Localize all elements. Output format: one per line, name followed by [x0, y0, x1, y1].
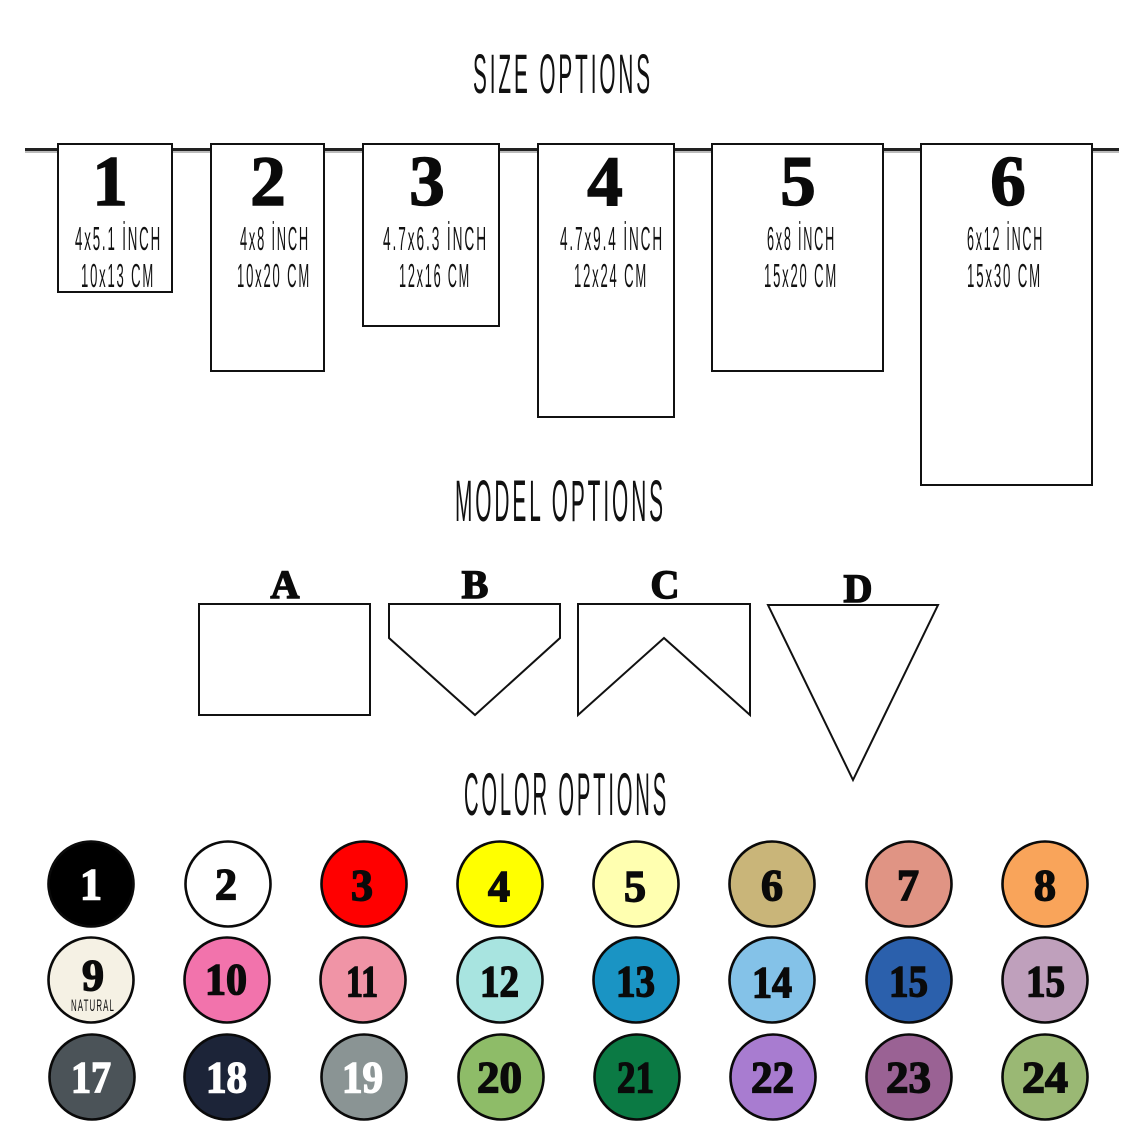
- swatch 21: [594, 1034, 680, 1120]
- model C: swallowtail: C: [651, 562, 679, 607]
- swatch 15 blue: 15: [889, 957, 928, 1006]
- swatch 24: [1002, 1034, 1088, 1120]
- swatch 6: [730, 842, 814, 926]
- panel: size 2: [211, 143, 324, 371]
- text: 4x5.1 İNCH: [75, 220, 162, 257]
- swatch 18: 18: [206, 1053, 247, 1102]
- panel: size 5: 15x20 CM: [764, 257, 838, 294]
- text: MODEL OPTIONS: [455, 469, 666, 534]
- swatch 14: 14: [752, 958, 792, 1007]
- swatch 22: 22: [751, 1053, 794, 1102]
- swatch 11: 11: [346, 957, 378, 1006]
- hanging rod: [25, 148, 1119, 153]
- swatch 7: [866, 842, 952, 926]
- text: 10x13 CM: [81, 257, 155, 294]
- swatch 17: [50, 1034, 134, 1120]
- swatch 4: [458, 842, 542, 926]
- swatch 19: 19: [342, 1053, 383, 1102]
- swatch 15 mauve: [1002, 938, 1088, 1022]
- panel: size 4: 4: [587, 143, 623, 221]
- swatch 21: 21: [617, 1053, 654, 1102]
- panel: size 5: 5: [780, 143, 816, 221]
- swatch 2: [186, 842, 270, 926]
- model B: pointed pennant: [389, 562, 560, 715]
- panel: size 3: 3: [409, 143, 445, 221]
- swatch 20: [458, 1034, 544, 1120]
- swatch 23: [866, 1034, 952, 1120]
- swatch 18: [184, 1034, 270, 1120]
- swatch 17: 17: [71, 1053, 111, 1102]
- swatch 5: [594, 842, 678, 926]
- swatch 9 natural: [48, 938, 134, 1022]
- swatch 11: [320, 938, 406, 1022]
- swatch 1: 1: [80, 860, 102, 909]
- text: 4.7x6.3 İNCH: [383, 220, 488, 257]
- swatch 8: 8: [1034, 861, 1056, 910]
- swatch 8: [1002, 842, 1088, 926]
- swatch 20: 20: [477, 1053, 522, 1102]
- model A: rectangle: [199, 562, 370, 715]
- model D: triangle: D: [844, 566, 872, 611]
- swatch 13: [594, 938, 678, 1022]
- swatch 15 mauve: 15: [1026, 957, 1065, 1006]
- panel: size 6: 6: [990, 143, 1026, 221]
- swatch 3: [322, 842, 406, 926]
- swatch 24: 24: [1022, 1053, 1068, 1102]
- text: 4.7x9.4 İNCH: [560, 220, 664, 257]
- panel: size 1: 1: [92, 143, 128, 221]
- model B: pointed pennant: B: [462, 562, 488, 607]
- swatch 22: [730, 1034, 816, 1120]
- swatch 3: 3: [351, 861, 373, 910]
- text: SIZE OPTIONS: [473, 42, 653, 105]
- text: 10x20 CM: [237, 257, 311, 294]
- swatch 23: 23: [886, 1053, 931, 1102]
- swatch 19: [322, 1034, 406, 1120]
- text: COLOR OPTIONS: [464, 761, 669, 828]
- text: 4x8 İNCH: [240, 220, 310, 257]
- panel: size 4: 12x24 CM: [574, 257, 648, 294]
- panel: size 1: [58, 143, 172, 294]
- swatch 7: 7: [897, 861, 919, 910]
- swatch 5: 5: [624, 862, 646, 911]
- panel: size 3: 12x16 CM: [399, 257, 471, 294]
- swatch 15 blue: [866, 938, 952, 1022]
- panel: size 5: [712, 143, 883, 371]
- swatch 13: 13: [616, 957, 655, 1006]
- swatch 10: [184, 938, 270, 1022]
- swatch 9 natural: 9: [82, 951, 104, 1000]
- model D: triangle: [768, 566, 938, 780]
- swatch 2: 2: [215, 860, 237, 909]
- swatch 10: 10: [205, 955, 247, 1004]
- panel: size 3: [363, 143, 499, 326]
- swatch 14: [730, 938, 814, 1022]
- color swatch grid: [48, 842, 1088, 1120]
- model C: swallowtail: [578, 562, 750, 715]
- swatch 6: 6: [761, 861, 783, 910]
- panel: size 5: 6x8 İNCH: [767, 220, 836, 257]
- panel: size 6: [921, 143, 1092, 485]
- swatch 9 natural: NATURAL: [71, 996, 115, 1015]
- swatch 12: 12: [480, 957, 519, 1006]
- panel: size 4: [538, 143, 674, 417]
- model A: rectangle: A: [271, 562, 300, 607]
- swatch 4: 4: [488, 862, 510, 911]
- swatch 1: [48, 842, 134, 926]
- panel: size 2: 2: [250, 143, 286, 221]
- swatch 12: [458, 938, 542, 1022]
